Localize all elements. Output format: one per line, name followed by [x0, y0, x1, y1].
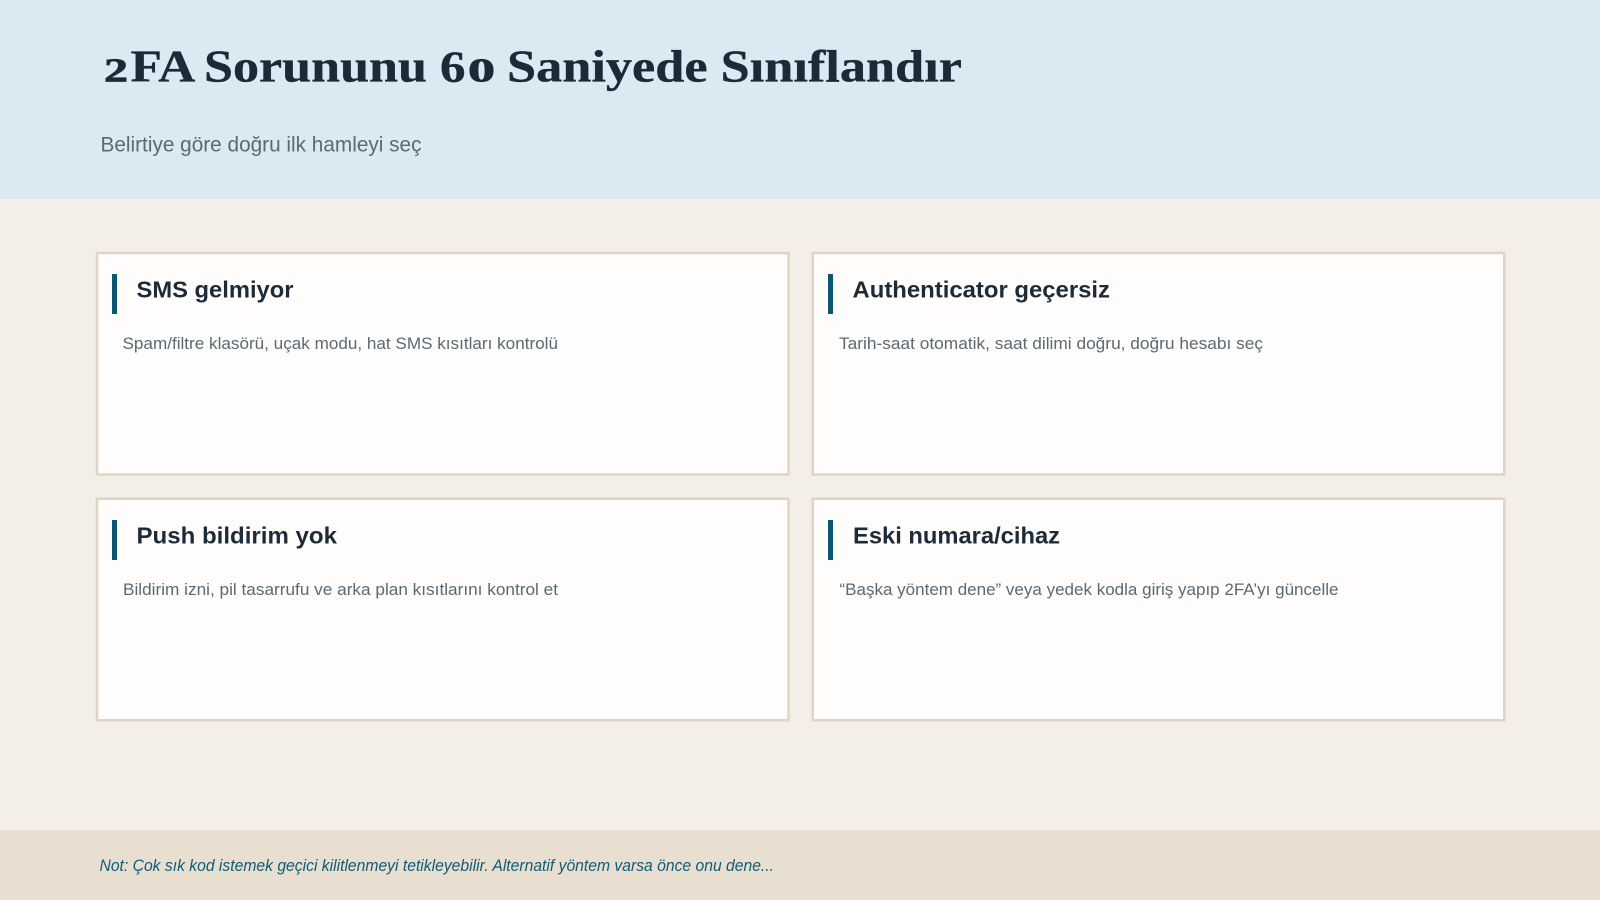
accent bar	[112, 274, 117, 314]
card heading: Push bildirim yok	[136, 522, 337, 548]
title: Saniyede Sınıflandır	[507, 40, 962, 92]
card text: Bildirim izni, pil tasarrufu ve arka plan kısıtlarını kontrol et	[123, 581, 558, 599]
card text: Tarih-saat otomatik, saat dilimi doğru, doğru hesabı seç	[839, 335, 1263, 353]
title: 0	[468, 52, 495, 90]
footer note: Not: Çok sık kod istemek geçici kilitlenmeyi tetikleyebilir. Alternatif yöntem varsa önce onu dene...	[100, 857, 774, 875]
panel: Eski numara/cihaz	[813, 499, 1504, 720]
card heading: SMS gelmiyor	[136, 276, 294, 302]
title: FA	[130, 40, 195, 92]
panel: Push bildirim yok	[97, 499, 788, 720]
accent bar	[828, 274, 833, 314]
title: 6	[440, 42, 466, 92]
subtitle: Belirtiye göre doğru ilk hamleyi seç	[100, 134, 422, 156]
card heading: Authenticator geçersiz	[852, 276, 1110, 302]
accent bar	[112, 520, 117, 560]
header band	[0, 0, 1600, 198]
card heading: Eski numara/cihaz	[853, 522, 1060, 548]
card text: “Başka yöntem dene” veya yedek kodla giriş yapıp 2FA’yı güncelle	[840, 581, 1338, 599]
panel: Authenticator geçersiz	[813, 253, 1504, 474]
title: 2	[104, 52, 128, 90]
card text: Spam/filtre klasörü, uçak modu, hat SMS kısıtları kontrolü	[122, 335, 558, 353]
footer band	[0, 830, 1600, 900]
title: Sorununu	[204, 40, 427, 92]
accent bar	[828, 520, 833, 560]
panel: SMS gelmiyor	[97, 253, 788, 474]
